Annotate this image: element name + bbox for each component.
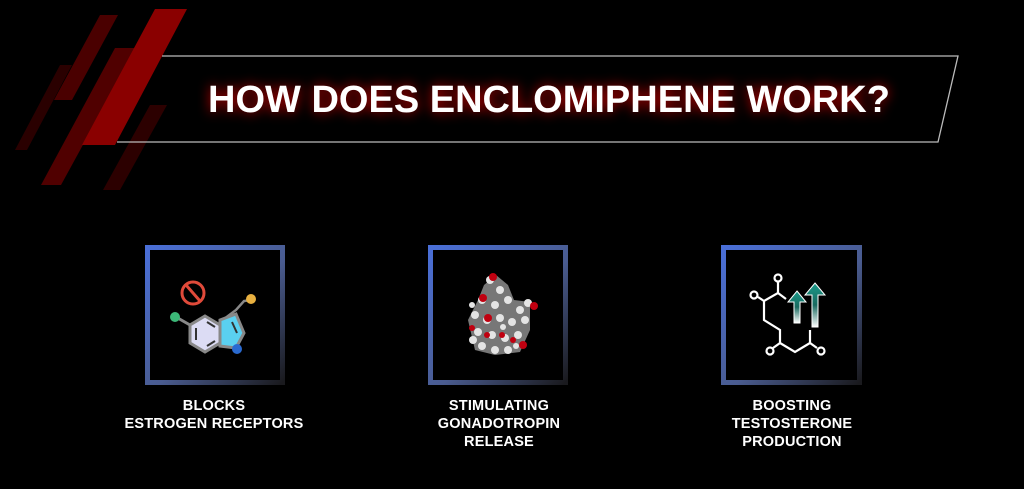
icon: up arrows (788, 283, 825, 327)
decorative red stripes (15, 9, 187, 190)
title banner: HOW DOES ENCLOMIPHENE WORK? (208, 79, 890, 121)
label: stimulating gonadotropin release: GONADOTROPIN (438, 416, 560, 432)
panel: gonadotropin icon box (430, 248, 566, 382)
label: stimulating gonadotropin release: RELEASE (464, 434, 534, 450)
icon: structure with arrows (750, 274, 824, 354)
panel: testosterone icon box (724, 248, 860, 382)
label: boosting testosterone production: BOOSTING (753, 398, 831, 414)
label: blocks estrogen receptors (124, 398, 303, 432)
label: blocks estrogen receptors: BLOCKS (183, 398, 245, 414)
panel: blocks estrogen receptors icon box (148, 248, 282, 382)
label: boosting testosterone production: TESTOSTERONE (732, 416, 852, 432)
icon: protein spheres (468, 273, 538, 355)
label: boosting testosterone production (732, 398, 852, 450)
label: stimulating gonadotropin release (438, 398, 560, 450)
label: boosting testosterone production: PRODUCTION (742, 434, 842, 450)
label: stimulating gonadotropin release: STIMULATING (449, 398, 549, 414)
title banner: HOW DOES ENCLOMIPHENE WORK? (208, 79, 890, 121)
label: blocks estrogen receptors: ESTROGEN RECEPTORS (124, 416, 303, 432)
icon: prohibit (182, 282, 204, 304)
icon: molecule (170, 294, 256, 354)
title banner (117, 56, 958, 142)
